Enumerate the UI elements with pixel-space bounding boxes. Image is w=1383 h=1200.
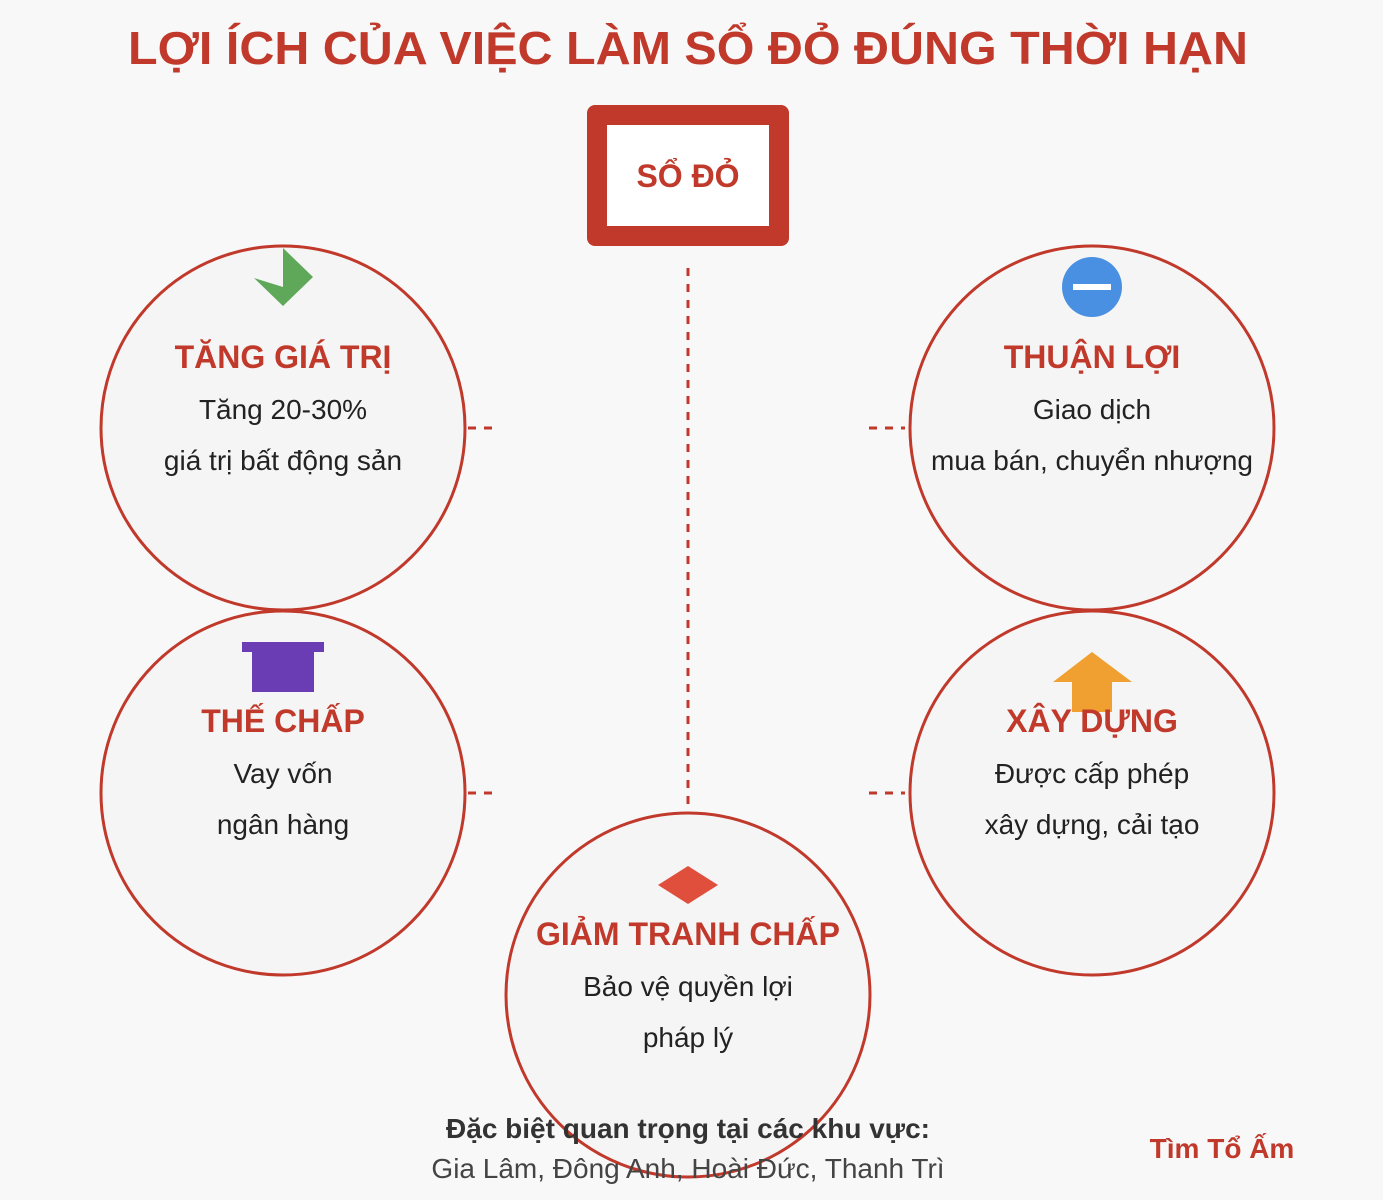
footer text	[431, 1113, 945, 1184]
icon: green check	[254, 248, 313, 306]
panel: giam tranh chap: GIẢM TRANH CHẤP	[536, 916, 840, 952]
panel: tang gia tri: TĂNG GIÁ TRỊ	[175, 339, 391, 375]
panel: thuan loi: mua bán, chuyển nhượng	[931, 445, 1253, 476]
footer text: Đặc biệt quan trọng tại các khu vực:	[446, 1113, 930, 1144]
center box: so do: SỔ ĐỎ	[636, 158, 740, 194]
title: LỢI ÍCH CỦA VIỆC LÀM SỔ ĐỎ ĐÚNG THỜI HẠN	[128, 22, 1248, 74]
panel: xay dung: xây dựng, cải tạo	[985, 809, 1199, 840]
panel: the chap: ngân hàng	[217, 809, 349, 840]
panel: the chap	[101, 611, 465, 975]
panel: xay dung	[910, 611, 1274, 975]
icon: red diamond	[658, 866, 718, 904]
panel: tang gia tri: Tăng 20-30%	[199, 394, 367, 425]
panel: giam tranh chap: pháp lý	[643, 1022, 733, 1053]
icon: blue minus circle	[1062, 257, 1122, 317]
panel: thuan loi: THUẬN LỢI	[1004, 339, 1180, 375]
brand: Tìm Tổ Ấm	[1150, 1133, 1294, 1164]
center box: so do	[587, 105, 789, 246]
panel: xay dung: Được cấp phép	[995, 758, 1189, 789]
panel: tang gia tri: giá trị bất động sản	[164, 445, 402, 476]
panel: thuan loi	[910, 246, 1274, 610]
panel: the chap: THẾ CHẤP	[201, 703, 365, 739]
footer text: Gia Lâm, Đông Anh, Hoài Đức, Thanh Trì	[431, 1153, 945, 1184]
panel: the chap: Vay vốn	[233, 758, 333, 789]
panel: thuan loi: Giao dịch	[1033, 394, 1151, 425]
panel: giam tranh chap: Bảo vệ quyền lợi	[583, 971, 793, 1002]
icon: purple box	[242, 642, 324, 692]
icon: orange arrow	[1053, 652, 1132, 712]
panel: xay dung: XÂY DỰNG	[1006, 703, 1178, 739]
panel: giam tranh chap	[506, 813, 870, 1177]
panel: tang gia tri	[101, 246, 465, 610]
